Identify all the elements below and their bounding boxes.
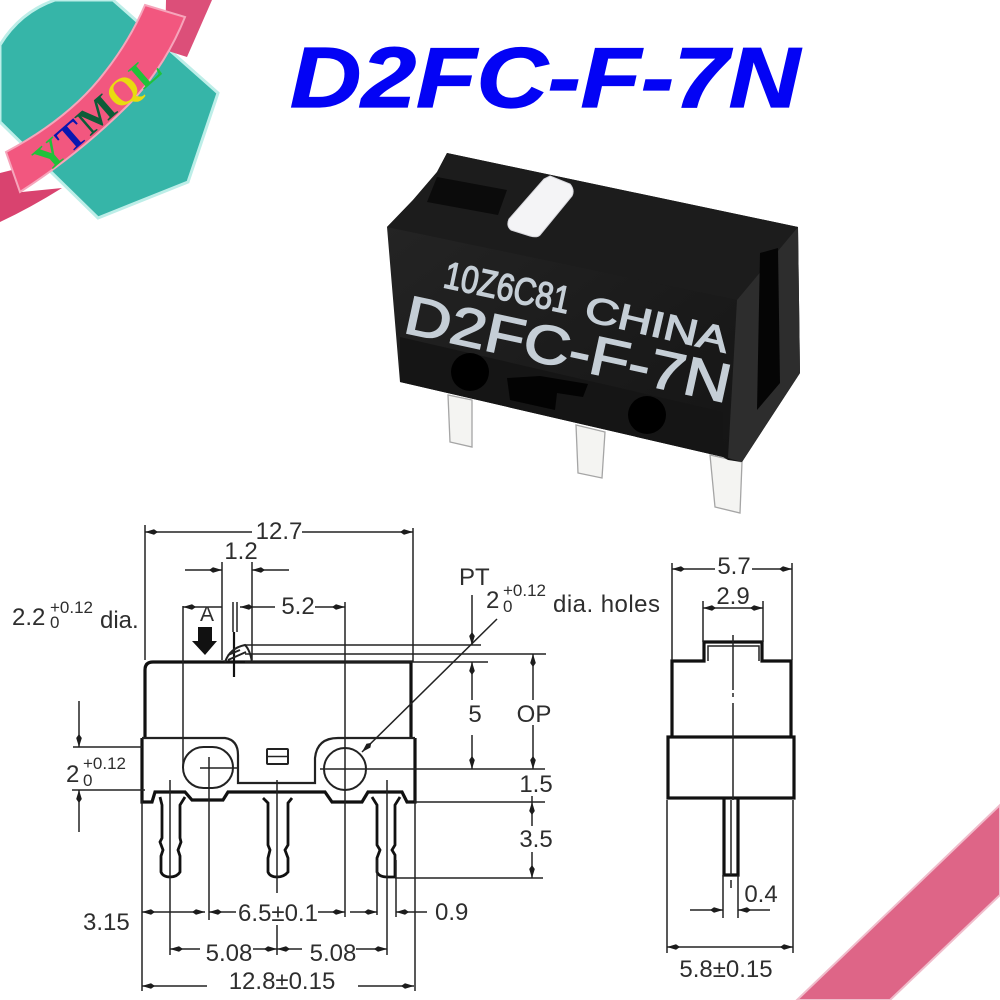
dimension: 12.8±0.15: 12.8±0.15 [229,968,335,995]
dimension: 3.15 [83,909,205,936]
dimension: 3.5 [519,802,553,878]
dimension: 5 [468,662,482,769]
label: 2 dia. holes with leader: 0 [503,597,512,616]
dimension: 5.7: 5.7 [717,553,751,580]
dimension: 1.2 [185,538,289,570]
dimension: 1.2: 1.2 [224,538,258,565]
dimension: 5.08 left [170,940,277,967]
dimension: 3.15: 3.15 [83,909,130,936]
switch marking: model: D2FC-F-7N [399,285,737,414]
dimension: OP: OP [517,701,551,728]
label: 2 dia. holes with leader: dia. holes [553,591,660,618]
label: 2.2 dia.: 0 [50,613,59,632]
label: 2 tolerance left: +0.12 [83,754,126,773]
switch marking: date code: 10Z6C81 [440,255,574,322]
label: 2.2 dia. [12,598,139,634]
switch body [387,153,800,462]
label: 2 dia. holes with leader [362,581,660,752]
dimension: 1.5: 1.5 [519,771,553,798]
extension and leader lines [72,525,546,991]
dimension: 5.08 right: 5.08 [310,940,356,967]
dimension: 0.4 [690,881,778,910]
dimension: 0.9: 0.9 [435,899,468,926]
switch notch [507,376,588,410]
decorative ribbon: bottom right [797,805,1000,1000]
label: 2 dia. holes with leader: +0.12 [503,581,546,600]
dimension: 5.8±0.15 [667,947,793,983]
label: PT [459,564,490,645]
dimension: 5.8±0.15: 5.8±0.15 [679,956,773,983]
drawing: side view dimensions [667,553,794,983]
label: 2.2 dia.: 2.2 [12,604,45,631]
switch top recess [427,177,507,215]
dimension: 5.7 [672,553,792,580]
product photo: microswitch [387,153,800,513]
dimension: 5.08 right [277,940,387,967]
label: 2 tolerance left: 2 [66,761,79,788]
switch front lower shelf [400,337,723,457]
title: D2FC-F-7N [290,31,802,126]
label: PT: PT [459,564,490,591]
dimension: 6.5±0.1 [209,900,345,927]
dimension: 3.5: 3.5 [519,826,553,853]
logo: front ribbon [6,5,185,192]
switch mounting holes [451,353,666,434]
dimension: 12.7: 12.7 [256,518,302,545]
drawing: front view dimensions [12,518,660,995]
dimension: OP [517,654,551,769]
side view lines [667,563,793,953]
label: 2 dia. holes with leader: 2 [486,587,499,614]
logo: back ribbon upper [165,0,212,57]
dimension: 2.9 [703,583,763,610]
dimension: 0.9 [350,899,468,926]
switch marking: origin: CHINA [581,288,733,361]
label: A with actuation arrow: A [200,603,214,626]
dimension: 5.2: 5.2 [281,593,315,620]
front view pins [160,797,400,877]
switch plunger [508,176,573,237]
dimension: 6.5±0.1: 6.5±0.1 [238,900,318,927]
label: A with actuation arrow [192,603,217,655]
logo: teal badge [0,0,218,218]
logo: back ribbon lower [0,170,62,222]
label: 2 tolerance left: 0 [83,771,92,790]
switch pins [448,395,742,513]
dimension: 2.9: 2.9 [716,583,750,610]
logo: brand text: YTMQL [25,47,170,181]
logo: YTMQL ribbon badge [0,0,218,222]
label: 2.2 dia.: dia. [100,607,139,634]
switch side slot [757,248,780,410]
side view outline [668,642,794,875]
label: 2.2 dia.: +0.12 [50,598,93,617]
dimension: 5: 5 [468,701,482,728]
dimension: 0.4: 0.4 [744,881,778,908]
front view outline [142,602,415,802]
switch top face [387,153,798,300]
dimension: 5.08 left: 5.08 [206,940,252,967]
switch side face [728,227,800,462]
label: 2 tolerance left [66,701,126,832]
